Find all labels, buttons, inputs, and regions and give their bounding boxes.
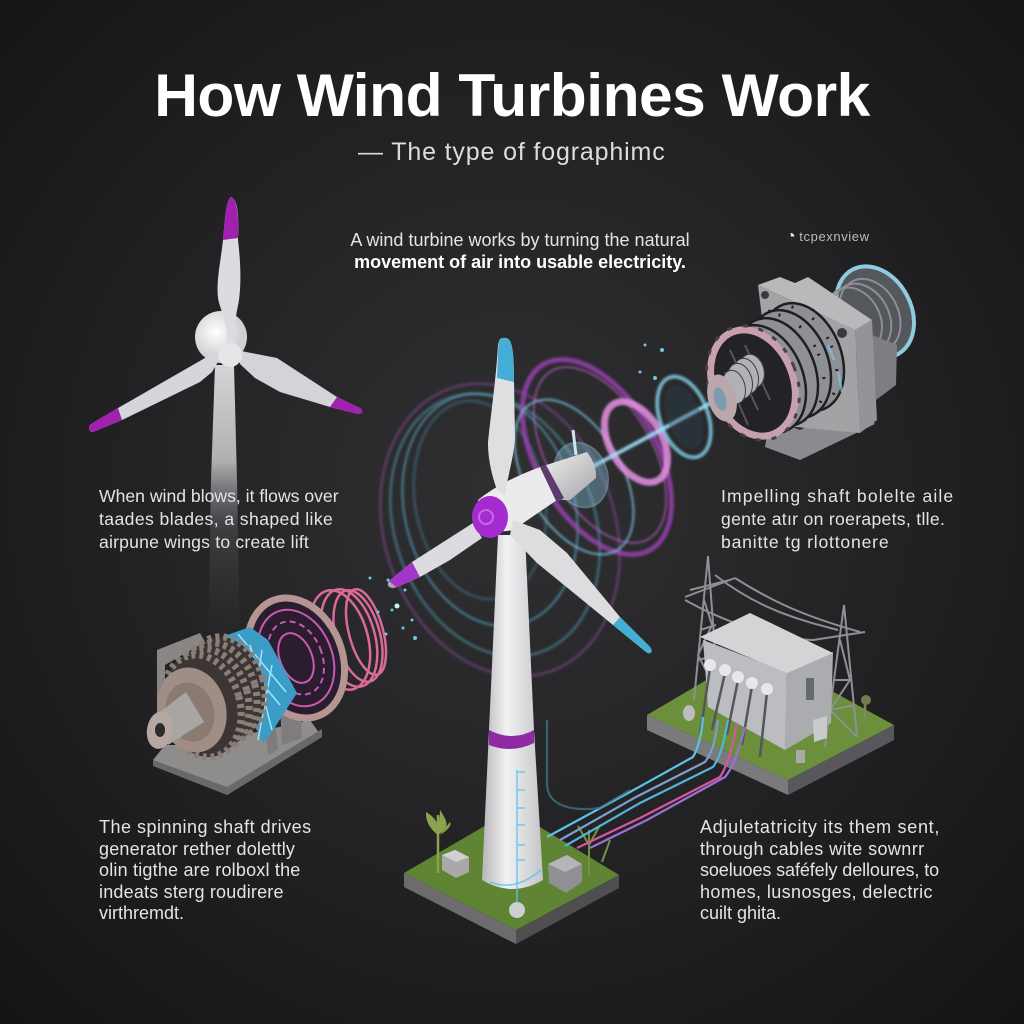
main turbine base island bbox=[404, 810, 619, 944]
text: step 2, shaft: banitte tg rlottonere bbox=[721, 532, 889, 552]
small turbine, top left bbox=[89, 197, 362, 640]
particles bbox=[368, 344, 664, 640]
text: step 4, grid: cuilt ghita. bbox=[700, 903, 781, 923]
title: How Wind Turbines Work bbox=[154, 61, 870, 129]
text: step 3, generator: The spinning shaft drives bbox=[99, 817, 312, 837]
text: step 2, shaft: Impelling shaft bolelte aile bbox=[721, 486, 954, 506]
text: step 4, grid: through cables wite sownrr bbox=[700, 839, 925, 859]
text: step 2, shaft: gente atır on roerapets, tlle. bbox=[721, 509, 945, 529]
swirling energy rings behind main turbine bbox=[341, 334, 722, 710]
generator, top right bbox=[690, 253, 929, 460]
text: step 2, shaft bbox=[721, 486, 954, 552]
intro text: movement of air into usable electricity. bbox=[354, 252, 686, 272]
text: step 3, generator: olin tigthe are rolboxl the bbox=[99, 860, 301, 880]
text: step 3, generator: generator rether dolettly bbox=[99, 839, 295, 859]
subtitle: — The type of fographimc bbox=[358, 138, 666, 166]
substation island bbox=[647, 556, 894, 795]
text: step 4, grid: Adjuletatricity its them sent, bbox=[700, 817, 940, 837]
intro text: A wind turbine works by turning the natural bbox=[350, 230, 690, 250]
main turbine tower bbox=[482, 535, 543, 918]
text: step 3, generator: indeats sterg roudirere bbox=[99, 882, 284, 902]
text: step 1, wind blows: airpune wings to create lift bbox=[99, 532, 309, 552]
text: step 4, grid: soeluoes saféfely delloures, to bbox=[700, 860, 939, 880]
intro text bbox=[350, 230, 690, 272]
text: step 3, generator: virthremdt. bbox=[99, 903, 184, 923]
generator with glowing coils, lower left bbox=[144, 583, 394, 795]
text: step 1, wind blows bbox=[99, 486, 339, 552]
power cables bbox=[547, 717, 745, 848]
text: step 4, grid bbox=[700, 817, 940, 923]
text: step 4, grid: homes, lusnosges, delectric bbox=[700, 882, 933, 902]
text: step 3, generator bbox=[99, 817, 312, 923]
text: step 1, wind blows: When wind blows, it flows over bbox=[99, 486, 339, 506]
main turbine blades and nacelle bbox=[388, 338, 652, 653]
small label: ◔ tcpexnview bbox=[786, 228, 870, 245]
text: step 1, wind blows: taades blades, a shaped like bbox=[99, 509, 333, 529]
